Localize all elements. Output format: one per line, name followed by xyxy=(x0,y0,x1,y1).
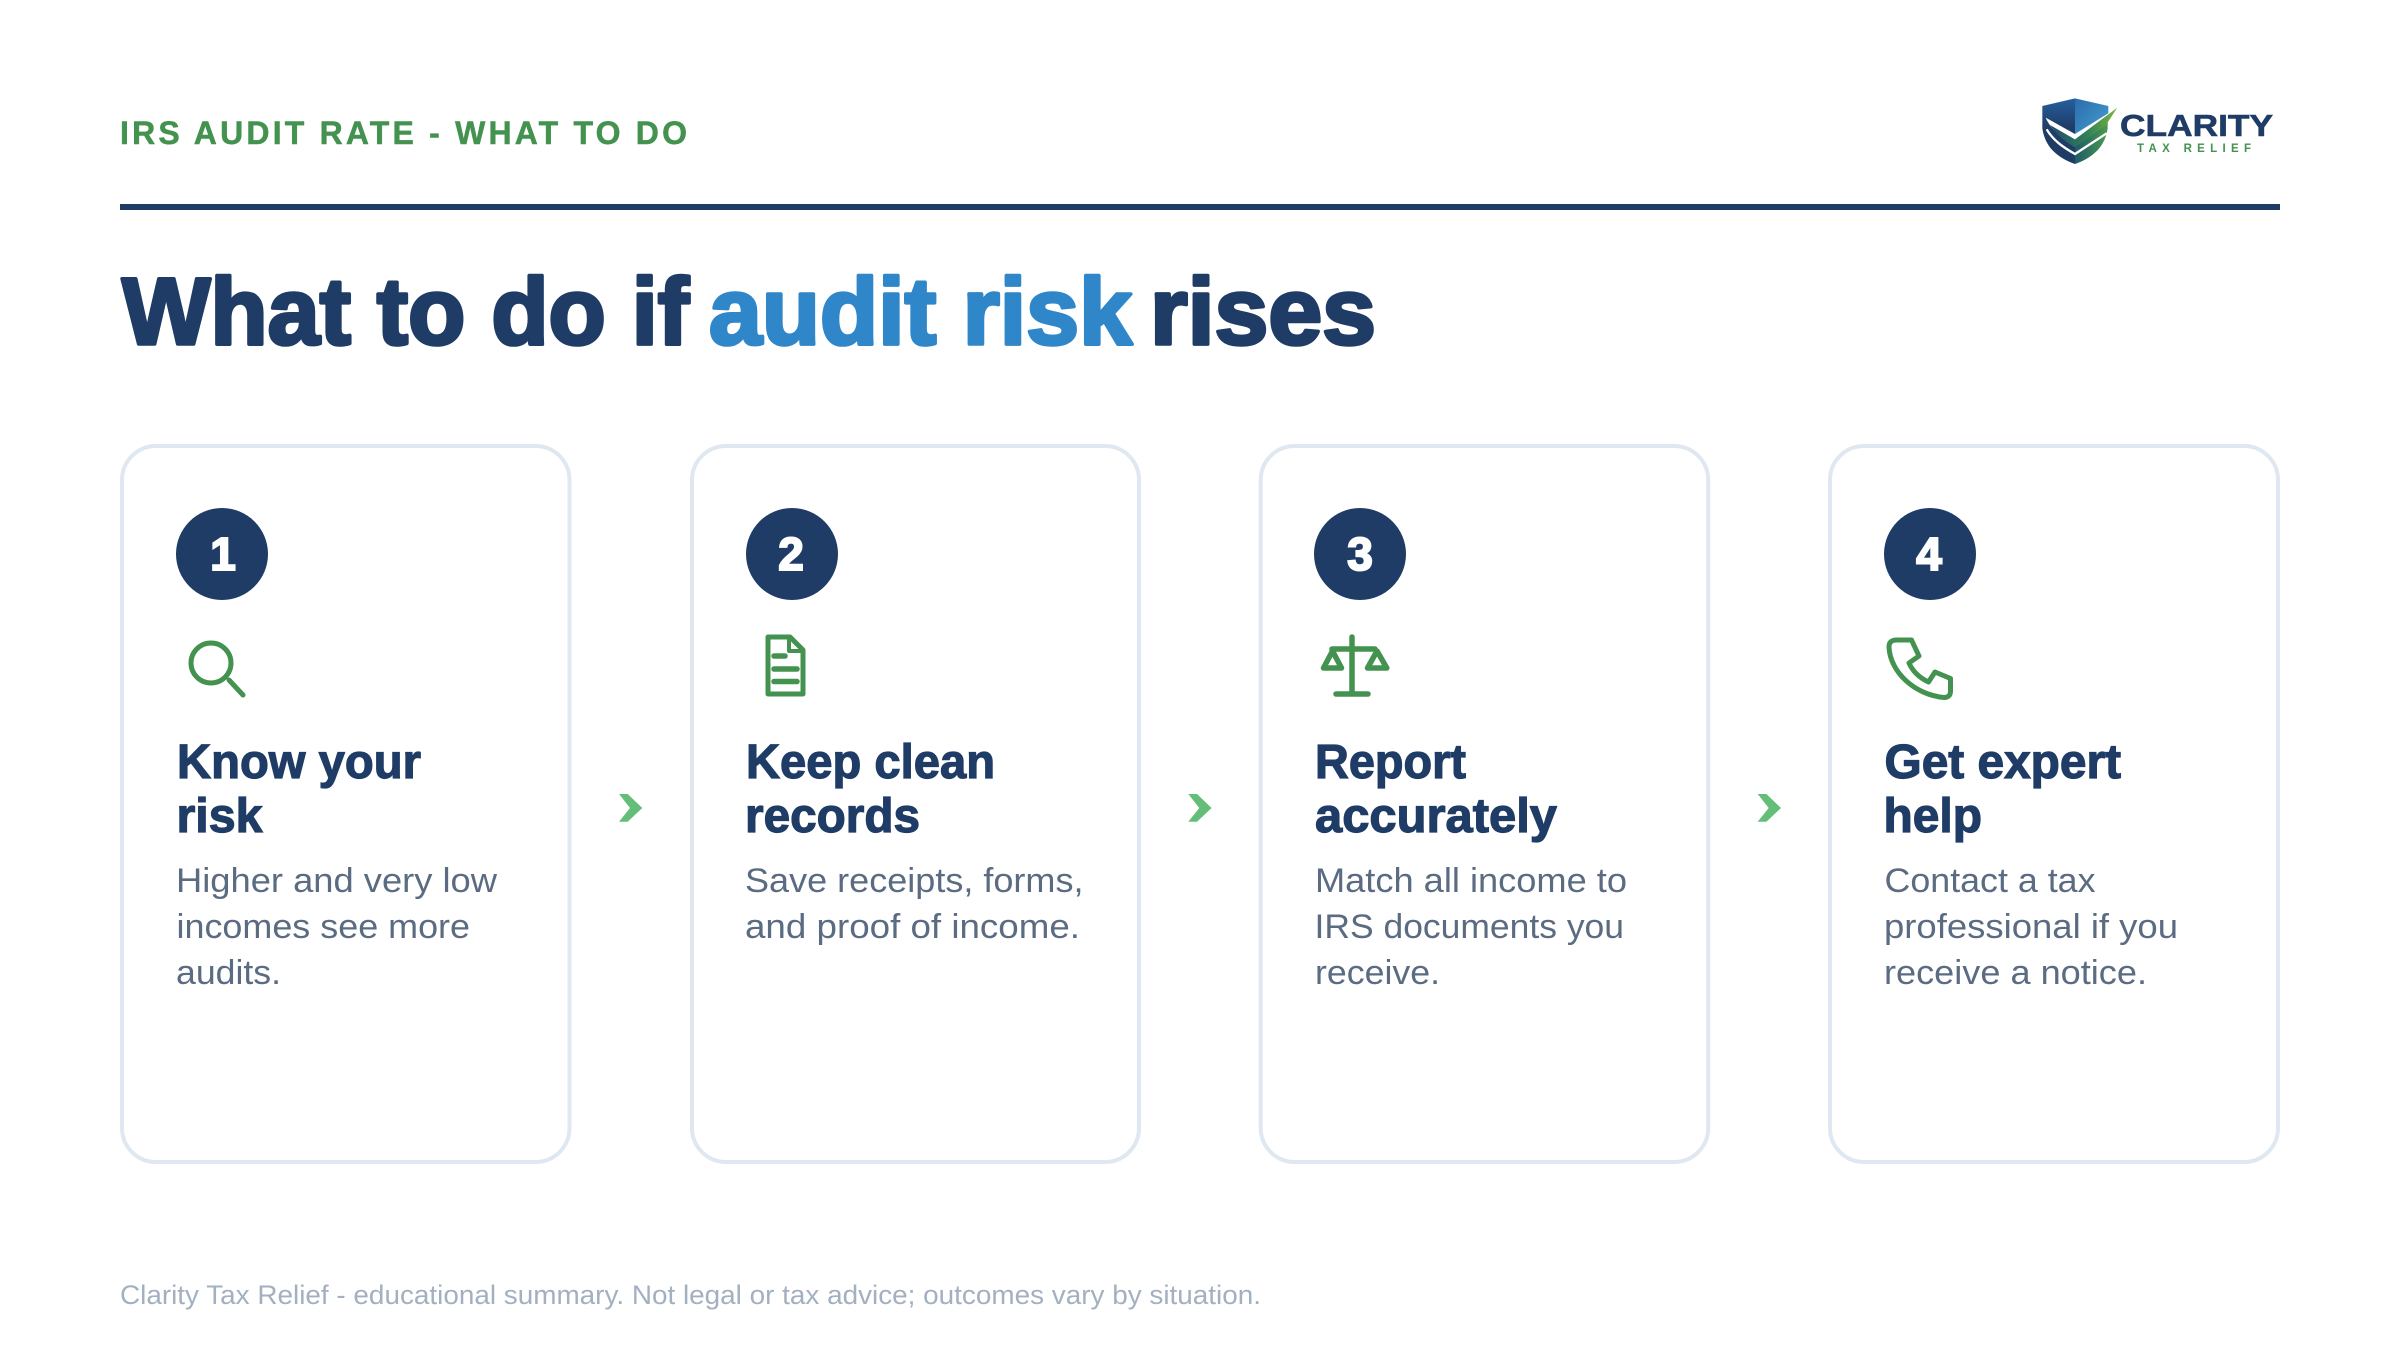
description xyxy=(745,862,1084,946)
description: incomes see more xyxy=(176,908,470,946)
heading: Report xyxy=(1315,736,1466,789)
panel: step 2 xyxy=(692,446,1139,1162)
icon: shield xyxy=(2042,98,2117,164)
heading: Keep clean xyxy=(746,736,995,789)
description xyxy=(1884,862,2178,992)
step number 1: 1 xyxy=(210,528,236,580)
description: IRS documents you xyxy=(1314,908,1624,946)
heading xyxy=(745,736,995,843)
title: rises xyxy=(1150,259,1376,365)
heading: Know your xyxy=(177,736,421,789)
description: and proof of income. xyxy=(745,908,1080,946)
heading xyxy=(176,736,421,843)
title: audit risk xyxy=(709,259,1132,365)
description: audits. xyxy=(176,954,281,992)
heading: records xyxy=(745,790,920,843)
title: What to do if xyxy=(122,259,689,365)
description: Save receipts, forms, xyxy=(745,862,1084,900)
panel: step 1 xyxy=(122,446,570,1162)
card outline xyxy=(692,446,1139,1162)
step number 3: 3 xyxy=(1347,528,1373,580)
step number 4 xyxy=(1884,508,1976,600)
logo wordmark: CLARITY xyxy=(2120,108,2273,143)
description: professional if you xyxy=(1884,908,2178,946)
description: Contact a tax xyxy=(1884,862,2096,900)
logo tagline: TAX RELIEF xyxy=(2137,143,2251,155)
arrow 3 xyxy=(1758,794,1781,822)
step number 3 xyxy=(1314,508,1406,600)
panel: step 3 xyxy=(1261,446,1708,1162)
heading: Get expert xyxy=(1884,736,2121,789)
step number 2: 2 xyxy=(778,528,804,580)
card outline xyxy=(1261,446,1708,1162)
heading xyxy=(1315,736,1557,843)
heading xyxy=(1884,736,2121,843)
step number 2 xyxy=(746,508,838,600)
panel: step 4 xyxy=(1830,446,2278,1162)
description xyxy=(176,862,497,992)
step number 1 xyxy=(176,508,268,600)
card outline xyxy=(1830,446,2278,1162)
heading: help xyxy=(1884,790,1982,843)
arrow 1 xyxy=(619,794,642,822)
description: receive. xyxy=(1315,954,1440,992)
footer note: Clarity Tax Relief - educational summary. Not legal or tax advice; outcomes vary by situation. xyxy=(120,1280,1261,1310)
icon: telephone xyxy=(1889,640,1950,698)
logo: Clarity Tax Relief xyxy=(2042,98,2273,164)
card outline xyxy=(122,446,570,1162)
arrow 2 xyxy=(1188,794,1212,822)
icon: balance scale xyxy=(1324,637,1387,694)
description: Higher and very low xyxy=(176,862,497,900)
heading: accurately xyxy=(1315,790,1557,843)
icon: magnifying glass xyxy=(191,643,243,695)
heading: risk xyxy=(176,790,263,843)
title xyxy=(122,259,1376,365)
description: receive a notice. xyxy=(1884,954,2147,992)
icon: document xyxy=(768,637,803,694)
description xyxy=(1314,862,1627,992)
step number 4: 4 xyxy=(1916,528,1942,580)
eyebrow heading: IRS AUDIT RATE - WHAT TO DO xyxy=(120,115,687,151)
description: Match all income to xyxy=(1315,862,1627,900)
